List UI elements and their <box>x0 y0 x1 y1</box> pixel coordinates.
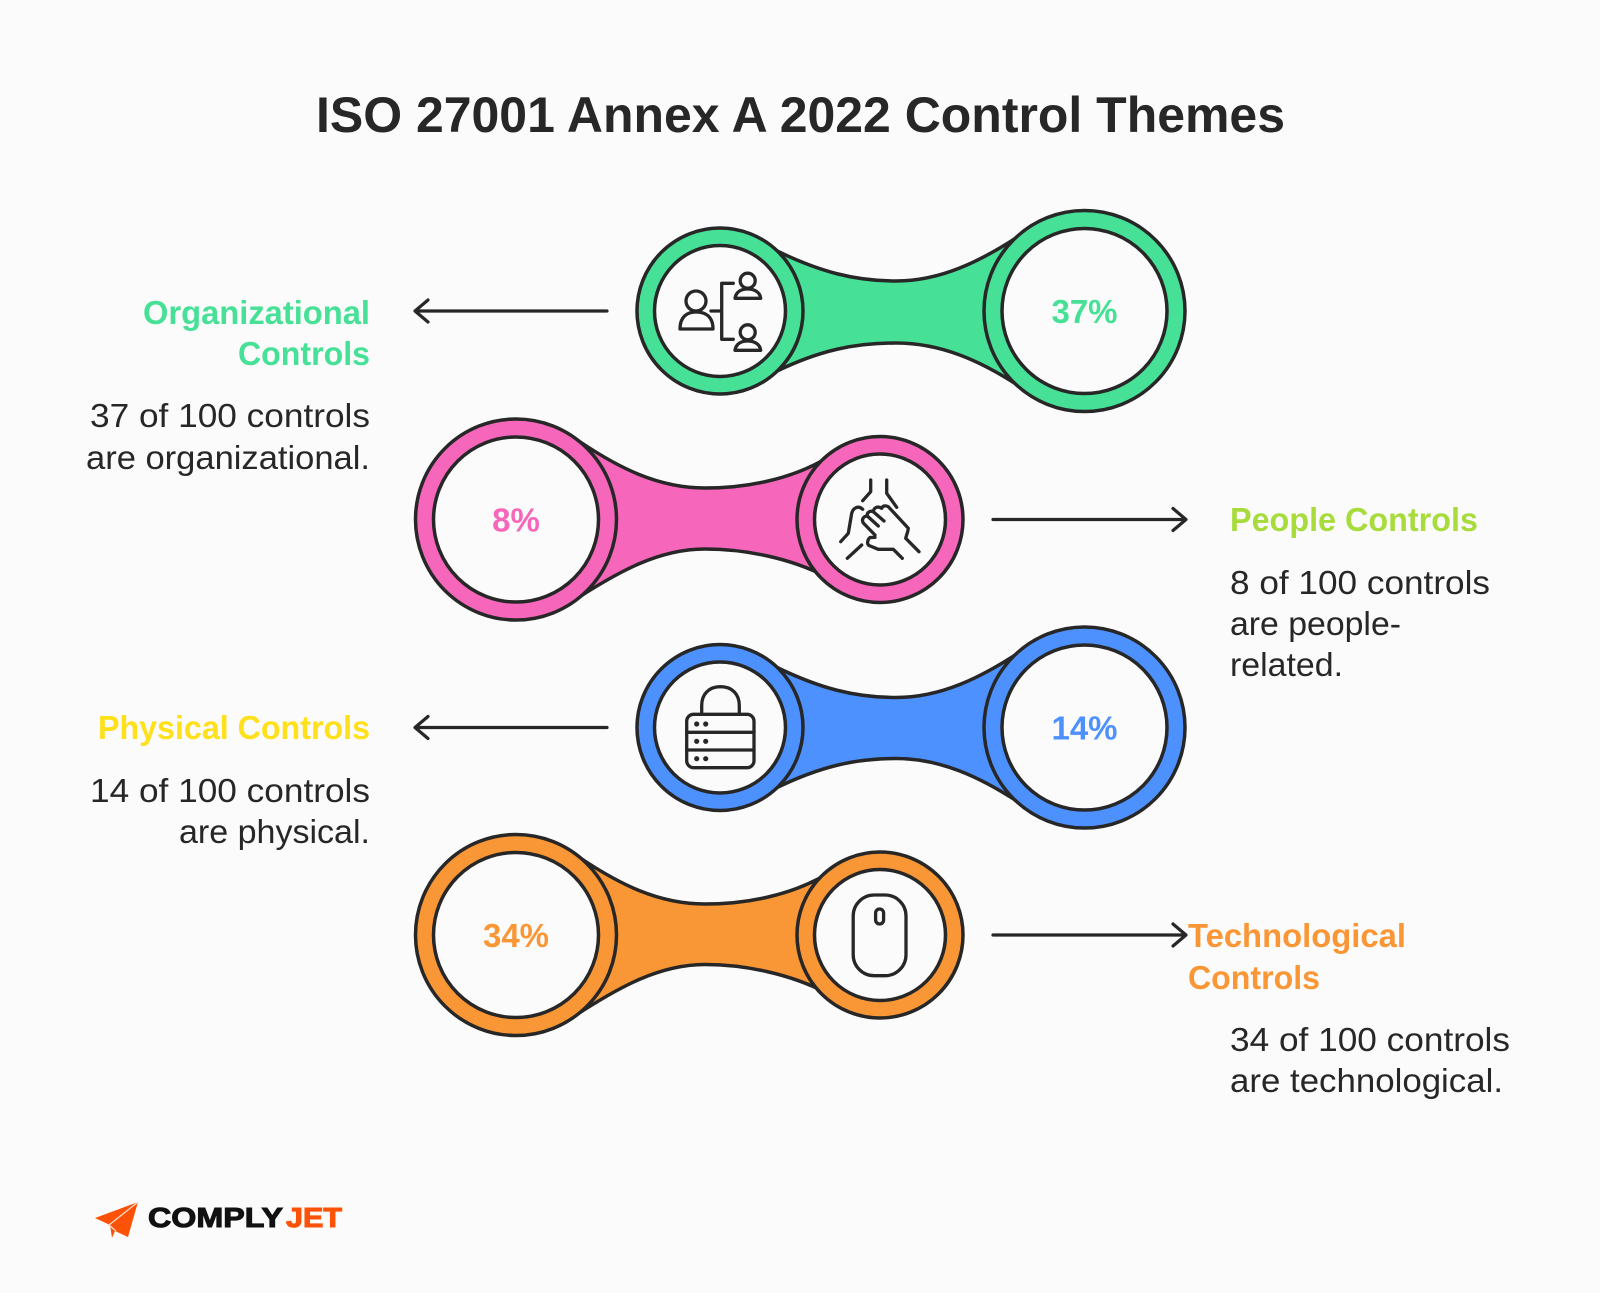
arrow: to people <box>993 508 1186 530</box>
percent: 14: 14% <box>1051 710 1118 746</box>
icon: paper plane <box>95 1202 138 1238</box>
ring: people percent <box>416 419 616 620</box>
text: people: 8 of 100 controls <box>1230 564 1490 601</box>
text: organizational: are organizational. <box>86 439 370 476</box>
icon: helping hands <box>841 480 919 558</box>
text: physical <box>90 772 370 850</box>
ring: organizational icon <box>637 228 803 394</box>
text: physical: are physical. <box>179 813 370 850</box>
arrow: to organizational <box>415 300 607 322</box>
ring: technological percent <box>416 834 616 1036</box>
text: physical: 14 of 100 controls <box>90 772 370 809</box>
text: organizational <box>86 397 370 476</box>
ring: physical icon <box>637 644 803 810</box>
connector: technological <box>570 851 827 1019</box>
heading: organizational line 2: Controls <box>238 335 370 372</box>
connector: physical <box>775 650 1022 804</box>
percent: 34: 34% <box>483 917 549 954</box>
ring: organizational percent <box>984 210 1185 412</box>
panel: physical controls diagram <box>637 627 1185 828</box>
wordmark: comply: COMPLY <box>148 1202 283 1233</box>
percent: 37: 37% <box>1051 293 1118 330</box>
ring: people icon <box>797 436 963 602</box>
text: technological: are technological. <box>1230 1062 1503 1099</box>
logo: complyjet <box>95 1202 342 1238</box>
ring: physical percent <box>984 627 1185 828</box>
title: ISO 27001 Annex A 2022 Control Themes <box>316 87 1285 143</box>
panel: organizational controls diagram <box>637 210 1185 412</box>
connector: people <box>570 435 827 603</box>
heading: physical: Physical Controls <box>98 709 370 746</box>
text: organizational: 37 of 100 controls <box>90 397 370 434</box>
arrow: to technological <box>993 924 1186 946</box>
text: people <box>1230 564 1490 683</box>
arrow: to physical <box>415 716 607 738</box>
wordmark: jet: JET <box>286 1202 342 1233</box>
text: people: are people- <box>1230 605 1401 642</box>
connector: organizational <box>775 234 1022 388</box>
heading: people: People Controls <box>1230 501 1478 538</box>
panel: people controls diagram <box>416 419 963 620</box>
text: technological: 34 of 100 controls <box>1230 1021 1510 1058</box>
text: people: related. <box>1230 646 1343 683</box>
icon: server lock <box>687 687 754 768</box>
panel: technological controls diagram <box>416 834 963 1036</box>
heading: technological: Technological <box>1188 917 1406 954</box>
heading: organizational: Organizational <box>143 294 370 331</box>
ring: technological icon <box>797 852 963 1018</box>
icon: mouse <box>853 895 906 976</box>
percent: 8: 8% <box>492 502 540 538</box>
heading: technological line 2: Controls <box>1188 959 1320 996</box>
text: technological <box>1230 1021 1510 1099</box>
icon: org hierarchy <box>680 273 761 350</box>
